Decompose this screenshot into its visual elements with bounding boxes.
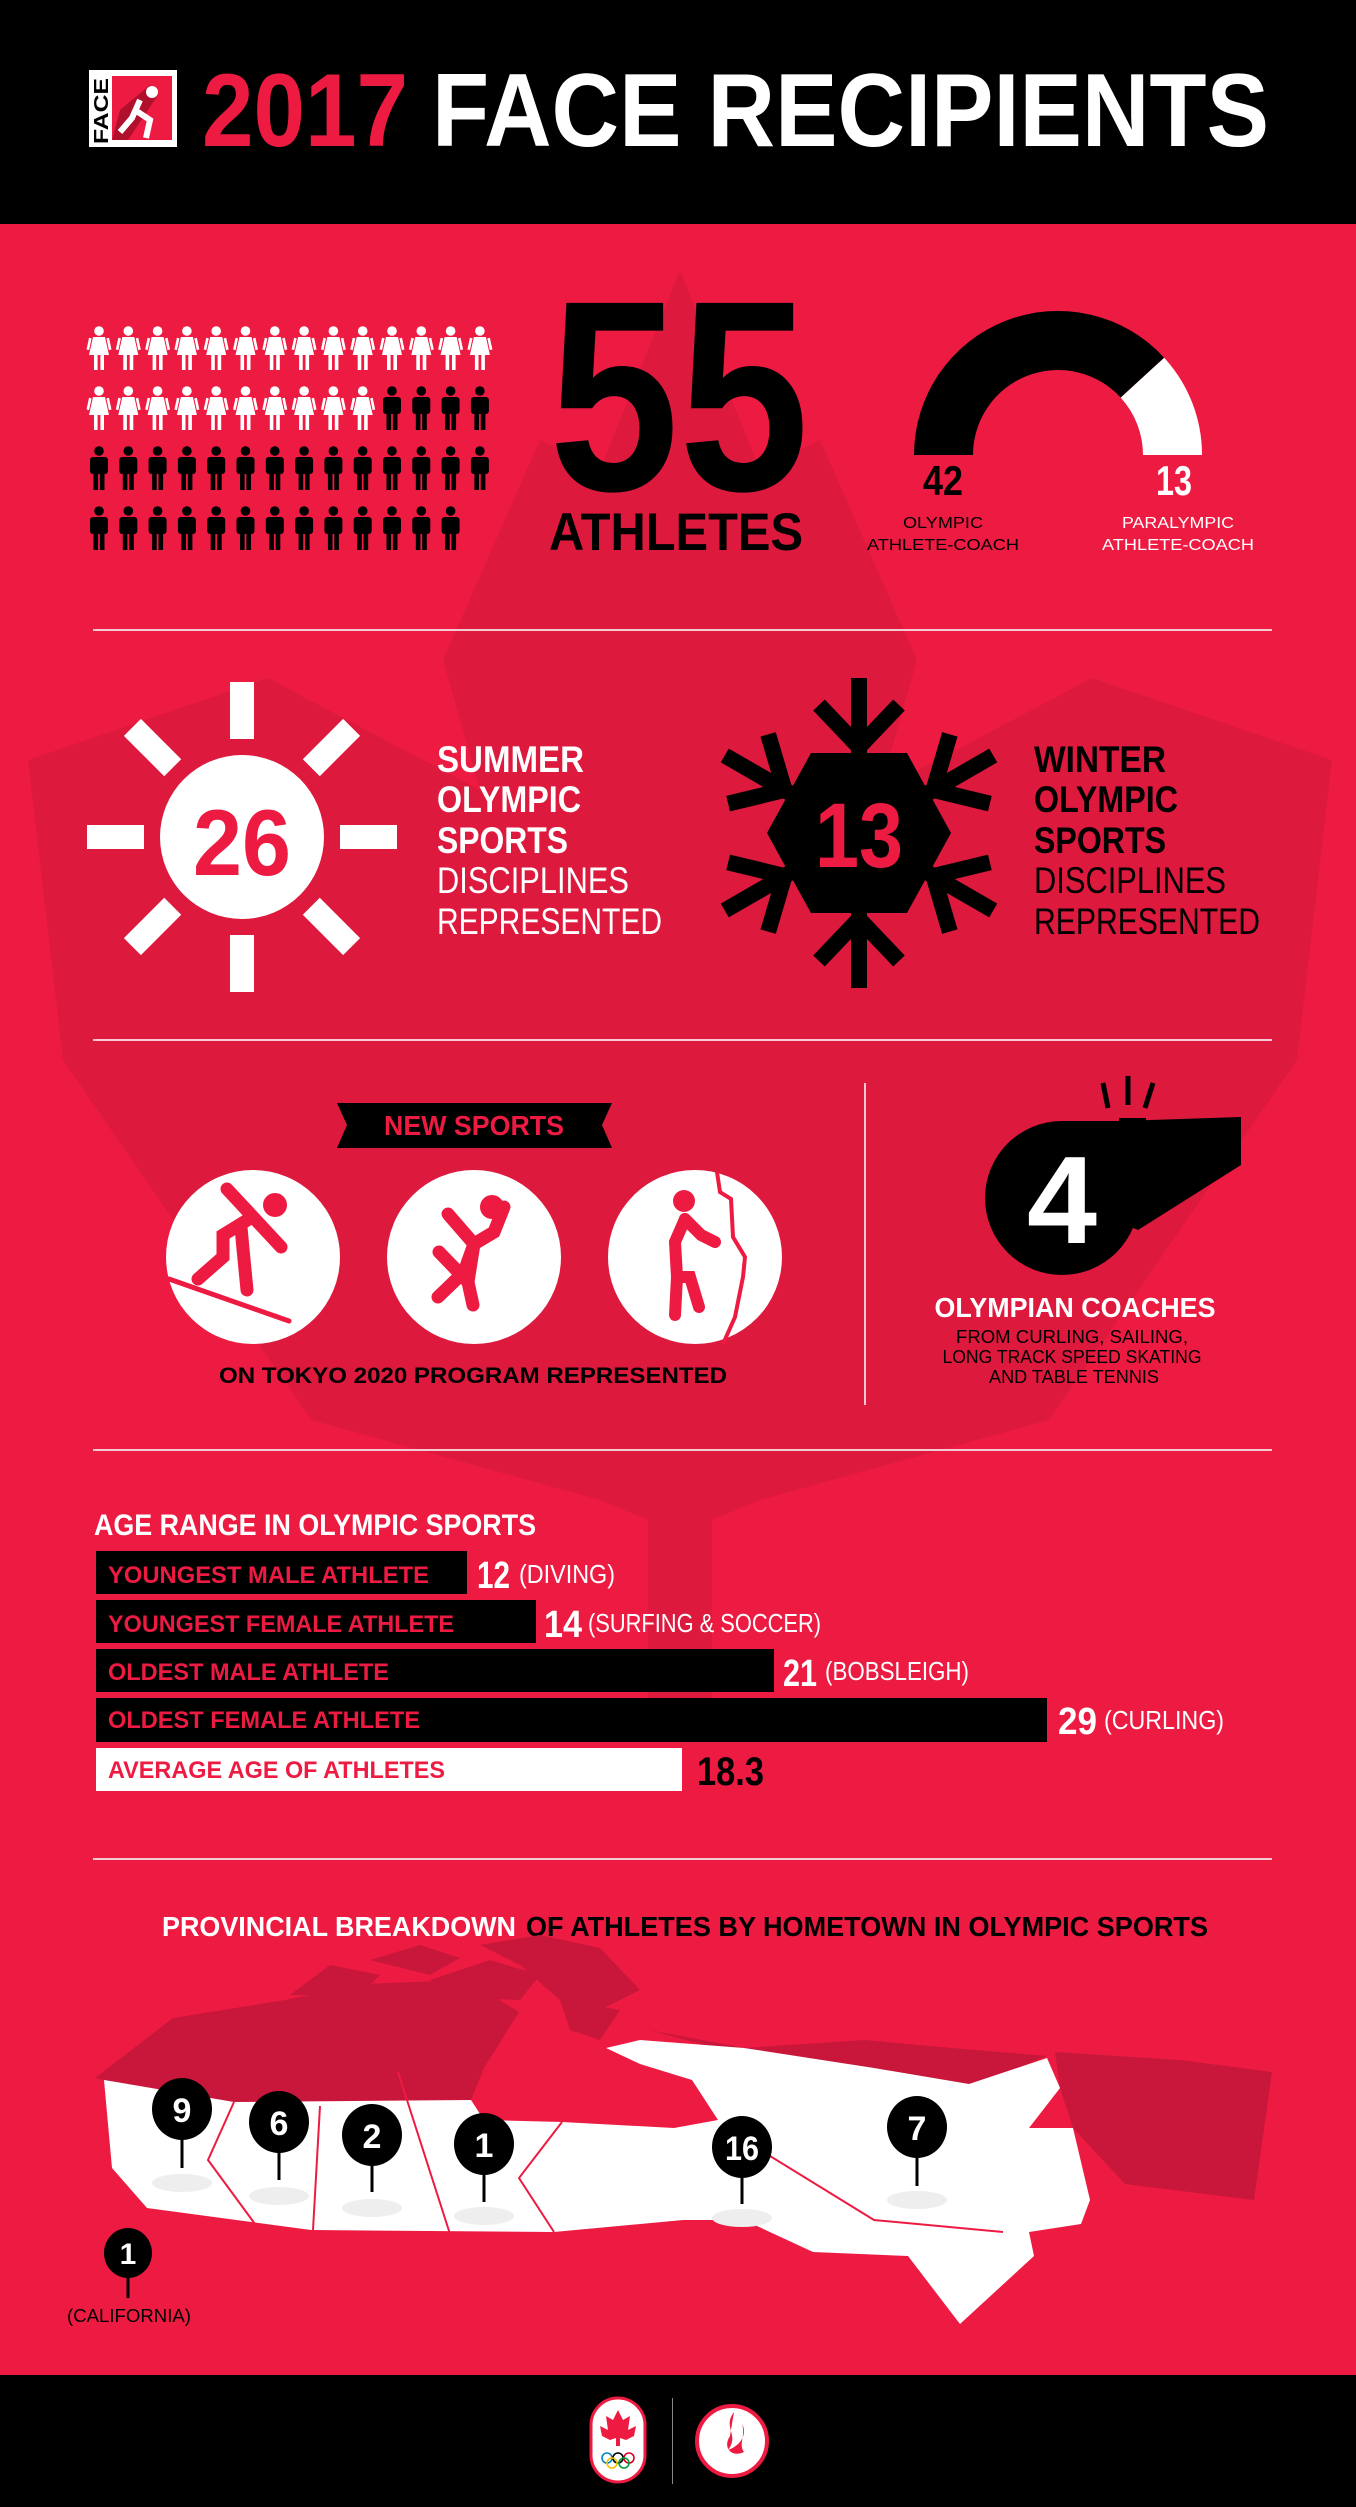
pin: SK 2: 2 — [363, 2118, 381, 2156]
bar: oldest female — [96, 1698, 1224, 1743]
icon: snowflake — [705, 678, 1013, 988]
ATHLETES label: ATHLETES — [549, 503, 803, 562]
text: summer: SUMMER — [437, 739, 584, 780]
pin: California 1 — [67, 2228, 191, 2326]
icon: skateboarding — [166, 1170, 340, 1344]
header — [0, 0, 1356, 224]
bar: youngest female — [96, 1600, 821, 1646]
text: summer: OLYMPIC — [437, 779, 581, 820]
title: 2017 — [202, 53, 408, 169]
icon: whistle: 4 — [1027, 1132, 1097, 1270]
pin: BC 9 — [152, 2078, 212, 2192]
pin: BC 9: 9 — [173, 2092, 191, 2130]
text: winter — [1034, 739, 1260, 942]
pin: QC 7 — [887, 2096, 947, 2209]
heading: provincial breakdown — [162, 1911, 1208, 1942]
icon: surfing/sport climbing jump — [387, 1170, 561, 1344]
panel: athletes — [87, 244, 1254, 562]
icon: whistle — [985, 1076, 1241, 1275]
text: winter: OLYMPIC — [1034, 779, 1178, 820]
panel: provincial breakdown — [67, 1911, 1272, 2326]
panel: olympian coaches — [934, 1076, 1241, 1387]
icon: snowflake: 13 — [815, 785, 903, 887]
gauge chart: PARALYMPIC — [1122, 515, 1234, 532]
logo: FACE: FACE — [91, 78, 113, 144]
pin: California 1: (CALIFORNIA) — [67, 2306, 191, 2326]
text: summer: DISCIPLINES — [437, 860, 629, 901]
text: summer: REPRESENTED — [437, 901, 662, 942]
map: Canada — [95, 1935, 1272, 2324]
bar: oldest female: 29 — [1058, 1701, 1097, 1743]
gauge chart: OLYMPIC — [903, 515, 983, 532]
text: winter: WINTER — [1034, 739, 1166, 780]
text: olympian coaches: AND TABLE TENNIS — [989, 1367, 1159, 1387]
heading: age range: AGE RANGE IN OLYMPIC SPORTS — [94, 1509, 536, 1542]
logo: Canadian Paralympic Committee — [697, 2406, 767, 2476]
logo: Canadian Olympic Committee — [591, 2398, 645, 2482]
icon: sun: 26 — [193, 790, 291, 895]
pin: AB 6 — [249, 2091, 309, 2205]
text: summer: SPORTS — [437, 820, 568, 861]
banner: new sports: NEW SPORTS — [384, 1110, 564, 1141]
bar: youngest male: 12 — [477, 1555, 510, 1597]
bar: oldest male: 21 — [783, 1653, 817, 1695]
bar: oldest male: (BOBSLEIGH) — [825, 1656, 969, 1686]
bar: oldest female: OLDEST FEMALE ATHLETE — [108, 1707, 420, 1734]
text: winter: REPRESENTED — [1034, 901, 1260, 942]
pin: MB 1 — [454, 2113, 514, 2225]
text: olympian coaches — [934, 1292, 1216, 1387]
background maple leaf — [28, 270, 1332, 1720]
bar: oldest male — [96, 1649, 969, 1695]
heading: provincial breakdown: OF ATHLETES BY HOMETOWN IN OLYMPIC SPORTS — [526, 1911, 1208, 1942]
panel: summer sports — [87, 682, 662, 992]
title: FACE RECIPIENTS — [432, 53, 1269, 169]
icon: sport climbing — [608, 1170, 782, 1344]
bar: youngest male: YOUNGEST MALE ATHLETE — [108, 1562, 429, 1589]
bar: oldest female: (CURLING) — [1104, 1705, 1224, 1735]
panel: age range — [94, 1509, 1224, 1794]
people grid — [87, 326, 492, 550]
pin: MB 1: 1 — [475, 2127, 493, 2165]
text: olympian coaches: FROM CURLING, SAILING, — [956, 1327, 1188, 1347]
pin: SK 2 — [342, 2104, 402, 2217]
bar: youngest male — [96, 1551, 615, 1597]
gauge chart: 42 — [923, 457, 963, 504]
pin: AB 6: 6 — [270, 2105, 288, 2143]
gauge chart: ATHLETE-COACH — [867, 537, 1019, 554]
bar: oldest male: OLDEST MALE ATHLETE — [108, 1659, 389, 1686]
text: olympian coaches: OLYMPIAN COACHES — [934, 1292, 1216, 1323]
text: winter: DISCIPLINES — [1034, 860, 1226, 901]
text: winter: SPORTS — [1034, 820, 1166, 861]
logo: FACE — [89, 70, 177, 147]
pin: California 1: 1 — [120, 2238, 136, 2271]
bar: youngest female: (SURFING & SOCCER) — [588, 1608, 821, 1638]
caption: tokyo: ON TOKYO 2020 PROGRAM REPRESENTED — [219, 1363, 727, 1388]
bar: average age: AVERAGE AGE OF ATHLETES — [108, 1757, 445, 1784]
pin: ON 16 — [712, 2116, 772, 2227]
bar: average age — [96, 1748, 764, 1794]
bar: youngest male: (DIVING) — [519, 1559, 615, 1589]
banner: new sports — [337, 1103, 612, 1148]
panel: new sports — [166, 1103, 782, 1388]
footer — [0, 2375, 1356, 2507]
gauge chart — [867, 311, 1254, 554]
pin: QC 7: 7 — [908, 2110, 926, 2148]
text: olympian coaches: LONG TRACK SPEED SKATING — [942, 1347, 1202, 1367]
bar: youngest female: 14 — [544, 1604, 582, 1646]
heading: provincial breakdown: PROVINCIAL BREAKDOWN — [162, 1911, 516, 1942]
gauge chart: ATHLETE-COACH — [1102, 537, 1254, 554]
gauge chart: 13 — [1156, 457, 1192, 504]
bar: youngest female: YOUNGEST FEMALE ATHLETE — [108, 1611, 454, 1638]
text: summer — [437, 739, 662, 942]
bar: average age: 18.3 — [697, 1750, 764, 1794]
icon: sun — [87, 682, 397, 992]
pin: ON 16: 16 — [725, 2130, 759, 2168]
panel: winter sports — [705, 678, 1260, 988]
big number 55: 55 — [549, 244, 809, 548]
